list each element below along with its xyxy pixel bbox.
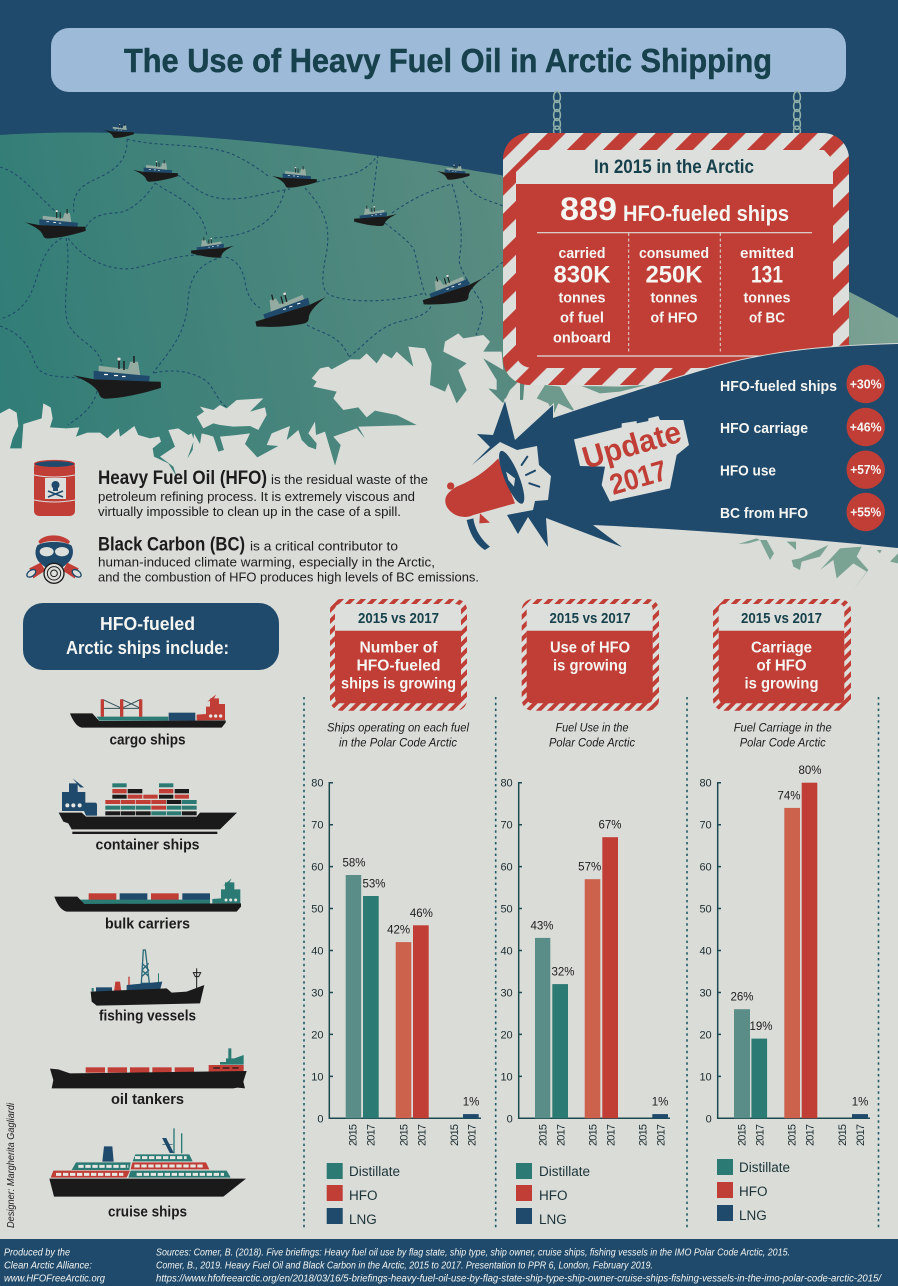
bar chart: fuel carriage: 74% [777,790,801,802]
chart subtitle 1 [327,723,469,750]
bar chart: fuel carriage: 2017 [755,1124,767,1146]
shipping routes [0,139,503,425]
label: fishing vessels: fishing vessels [99,1008,196,1024]
bar chart: ships on each fuel: 2017 [366,1124,378,1146]
stat: carried: onboard [553,330,611,347]
label: oil tankers: oil tankers [111,1091,184,1108]
bar chart: fuel carriage: 70 [699,820,712,832]
globe: Arctic sea [0,133,898,482]
bar chart: fuel carriage: 19% [749,1021,773,1033]
percentage badges [846,365,885,531]
bar chart: ships on each fuel: 53% [362,878,386,890]
bar chart: fuel use: 10 [500,1071,513,1083]
panel: use of HFO growing [522,599,659,711]
label: cruise ships: cruise ships [108,1204,187,1220]
bar chart: fuel carriage: 2017 [855,1124,867,1146]
heading: ships include [23,603,279,670]
update rows: BC from HFO [720,505,808,522]
chains holding the sign [554,92,800,136]
bar chart: fuel use: 2015 [587,1124,599,1146]
percentage badges: +55% [850,506,881,520]
bar chart: fuel carriage: 30 [699,988,712,1000]
stat: consumed: tonnes [650,290,698,307]
chart subtitle 3: Fuel Carriage in the [734,723,832,735]
update label: 2017 [606,455,671,502]
text: black carbon: Black Carbon (BC) [98,535,245,556]
bar chart: fuel use: 43% [530,920,554,932]
percentage badges: +30% [850,378,882,392]
bar chart: fuel use: 30 [500,988,513,1000]
stat: carried: carried [558,245,606,262]
bar chart: ships on each fuel: 2015 [449,1124,461,1146]
box heading: 2015 vs 2017 [741,610,822,627]
text: black carbon [98,535,479,585]
ship: bulk carrier [54,878,241,912]
legend 1 [327,1163,400,1227]
bar chart: ships on each fuel: 20 [311,1029,324,1041]
bar chart: fuel use: 1% [652,1096,668,1108]
panel: number of ships growing [330,599,467,711]
percentage badges: +46% [850,420,882,434]
panel: in 2015 in the Arctic [503,133,849,385]
legend 2: HFO [539,1188,568,1203]
producer credit: Produced by the [4,1248,70,1258]
chart subtitle 1: in the Polar Code Arctic [339,738,457,750]
bar chart: fuel use: 32% [551,967,575,979]
bar chart: ships on each fuel: 30 [311,988,324,1000]
box message: Carriage [751,639,812,656]
ice island [197,398,267,430]
legend 3 [717,1159,790,1223]
bar chart: fuel carriage: 2015 [737,1124,749,1146]
headline number: 889 [560,191,617,227]
ship: oil tanker [50,1048,247,1088]
legend 3: Distillate [739,1160,790,1175]
chart subtitle 2: Polar Code Arctic [549,738,635,750]
bar chart: fuel carriage: 2017 [805,1124,817,1146]
bar chart: ships on each fuel: 58% [342,858,366,870]
bar chart: fuel use: 70 [500,820,513,832]
label: cargo ships: cargo ships [110,732,186,748]
text: heavy fuel oil: virtually impossible to clean up in the case of a spill. [98,504,401,519]
sources: https://www.hfofreearctic.org/en/2018/03/16/5-briefings-heavy-fuel-oil-use-by-flag-state-ship-type-ship-owner-cruise-ships-fishing-vessels-in-the-imo-polar-code-arctic-2015/ [156,1274,882,1284]
designer credit: Designer: Margherita Gagliardi [5,1102,17,1228]
bar chart: fuel use [500,778,670,1146]
title banner [51,28,846,92]
bar chart: ships on each fuel: 40 [311,946,324,958]
bar chart: fuel use: 60 [500,862,513,874]
sources: Sources: Comer, B. (2018). Five briefings: Heavy fuel oil use by flag state, ship type, ship owner, cruise ships, fishing vessels in the IMO Polar Code Arctic, 2015. [156,1248,790,1258]
update label [574,414,689,502]
bar chart: fuel carriage: 2015 [787,1124,799,1146]
ships on the map [25,124,488,399]
producer credit: Clean Arctic Alliance: [4,1260,92,1272]
box message [550,639,630,674]
bar chart: fuel carriage: 2015 [837,1124,849,1146]
bar chart: fuel carriage: 80% [798,765,822,777]
legend 2: LNG [539,1212,567,1227]
update rows [720,378,837,522]
legend 3: LNG [739,1208,767,1223]
bar chart: fuel use: 0 [507,1113,513,1125]
headline label: HFO-fueled ships [623,201,789,226]
producer credit: www.HFOFreeArctic.org [4,1274,105,1284]
bar chart: fuel use: 2017 [556,1124,568,1146]
update rows: HFO carriage [720,420,808,437]
bar chart: fuel use: 2015 [638,1124,650,1146]
stat: emitted [740,245,794,327]
ship: container ship [59,778,237,834]
icon: oil barrel [34,460,75,516]
bar chart: fuel carriage: 40 [699,946,712,958]
stat: consumed: 250K [646,262,703,288]
heading: ships include: HFO-fueled [100,614,195,634]
percentage badges: +57% [850,463,881,477]
stat: consumed: of HFO [650,310,698,327]
icon: megaphone [445,448,539,550]
bar chart: fuel use: 2017 [605,1124,617,1146]
bar chart: ships on each fuel: 10 [311,1071,324,1083]
bar chart: ships on each fuel: 2017 [467,1124,479,1146]
ship: fishing vessel [91,950,204,1006]
legend 3: HFO [739,1184,768,1199]
text: heavy fuel oil: Heavy Fuel Oil (HFO) [98,468,267,489]
text: heavy fuel oil: petroleum refining process. It is extremely viscous and [98,489,415,504]
chart subtitle 2 [549,723,635,750]
text: black carbon: human-induced climate warming, especially in the Arctic, [98,555,435,570]
panel: carriage of HFO growing [713,599,851,711]
legend 1: HFO [349,1188,378,1203]
bar chart: fuel use: 57% [578,862,601,874]
ship: cruise ship [49,1128,246,1197]
bar chart: fuel use: 50 [500,904,513,916]
bar chart: ships on each fuel: 2017 [417,1124,429,1146]
bar chart: fuel carriage: 20 [699,1029,712,1041]
stat: carried: 830K [554,262,611,288]
bar chart: fuel use: 20 [500,1029,513,1041]
bar chart: ships on each fuel: 2015 [348,1124,360,1146]
bar chart: ships on each fuel: 50 [311,904,324,916]
bar chart: fuel use: 67% [598,820,622,832]
chart subtitle 2: Fuel Use in the [556,723,628,735]
bar chart: fuel carriage: 0 [706,1113,712,1125]
stat: emitted: 131 [751,262,783,288]
bar chart: fuel carriage: 50 [699,904,712,916]
stat: consumed: consumed [639,245,709,262]
bar chart: fuel use: 2015 [537,1124,549,1146]
bar chart: fuel use: 80 [500,778,513,790]
bar chart: ships on each fuel: 2015 [398,1124,410,1146]
bar chart: ships on each fuel: 70 [311,820,324,832]
update rows: HFO use [720,462,776,480]
box message: of HFO [756,657,806,674]
bar chart: fuel carriage: 60 [699,862,712,874]
stat: carried [553,245,611,347]
box message: Number of [360,639,438,656]
legend 2: Distillate [539,1164,590,1179]
ice fragments by the sign [537,385,647,415]
bar chart: fuel use: 40 [500,946,513,958]
stat: consumed [639,245,709,327]
box heading: 2015 vs 2017 [550,610,630,627]
bar chart: fuel use: 2017 [656,1124,668,1146]
bar chart: fuel carriage: 80 [699,778,712,790]
update label: Update [578,414,685,476]
box message: ships is growing [341,675,456,692]
sources [156,1248,882,1284]
text: heavy fuel oil: is the residual waste of the [271,472,428,487]
box heading: 2015 vs 2017 [358,610,439,627]
ship: cargo ship [70,694,226,728]
box message [744,639,818,692]
title: The Use of Heavy Fuel Oil in Arctic Shipping [124,42,772,79]
box message: is growing [744,675,818,692]
bar chart: fuel carriage: 26% [730,992,754,1004]
bar chart: ships on each fuel: 1% [463,1096,479,1108]
icon: gas mask [26,535,82,583]
legend 2 [516,1163,590,1227]
bar chart: fuel carriage [699,765,870,1146]
legend 1: Distillate [349,1164,400,1179]
footer [0,1239,898,1286]
box message: Use of HFO [550,639,630,656]
text: black carbon: is a critical contributor to [250,539,398,554]
column dividers [304,697,878,1228]
bar chart: ships on each fuel: 80 [311,778,324,790]
update 2017 banner [472,344,898,548]
sources: Comer, B., 2019. Heavy Fuel Oil and Black Carbon in the Arctic, 2015 to 2017. Presentation to PPR 6, London, February 2019. [156,1260,653,1272]
chart subtitle 3: Polar Code Arctic [740,738,826,750]
bar chart: fuel carriage: 1% [852,1096,868,1108]
bar chart: fuel carriage: 10 [699,1071,712,1083]
chart subtitle 3 [734,723,832,750]
stat: carried: tonnes [558,290,606,307]
producer credit [4,1248,105,1284]
box message [341,639,456,692]
light area under sign and banner [520,375,720,440]
text: heavy fuel oil [98,468,428,519]
stat: emitted: tonnes [744,290,790,307]
label: container ships: container ships [96,836,200,854]
ice fragments below banner [738,538,898,590]
box message: HFO-fueled [356,657,440,674]
chart subtitle 1: Ships operating on each fuel [327,723,469,735]
bar chart: ships on each fuel: 60 [311,862,324,874]
ice coastline [0,333,520,497]
bar chart: ships on each fuel [311,778,481,1146]
text: black carbon: and the combustion of HFO produces high levels of BC emissions. [98,570,479,585]
legend 1: LNG [349,1212,377,1227]
stat: carried: of fuel [560,310,604,327]
bar chart: ships on each fuel: 0 [317,1113,324,1125]
sign heading: In 2015 in the Arctic [594,157,754,178]
stat: emitted: emitted [740,245,794,262]
bar chart: ships on each fuel: 46% [410,908,433,920]
bar chart: ships on each fuel: 42% [387,924,410,936]
heading: ships include: Arctic ships include: [66,638,229,658]
stat: emitted: of BC [749,310,785,327]
top navy sky [0,0,898,345]
update rows: HFO-fueled ships [720,378,837,395]
box message: is growing [553,657,627,674]
label: bulk carriers: bulk carriers [105,916,190,932]
